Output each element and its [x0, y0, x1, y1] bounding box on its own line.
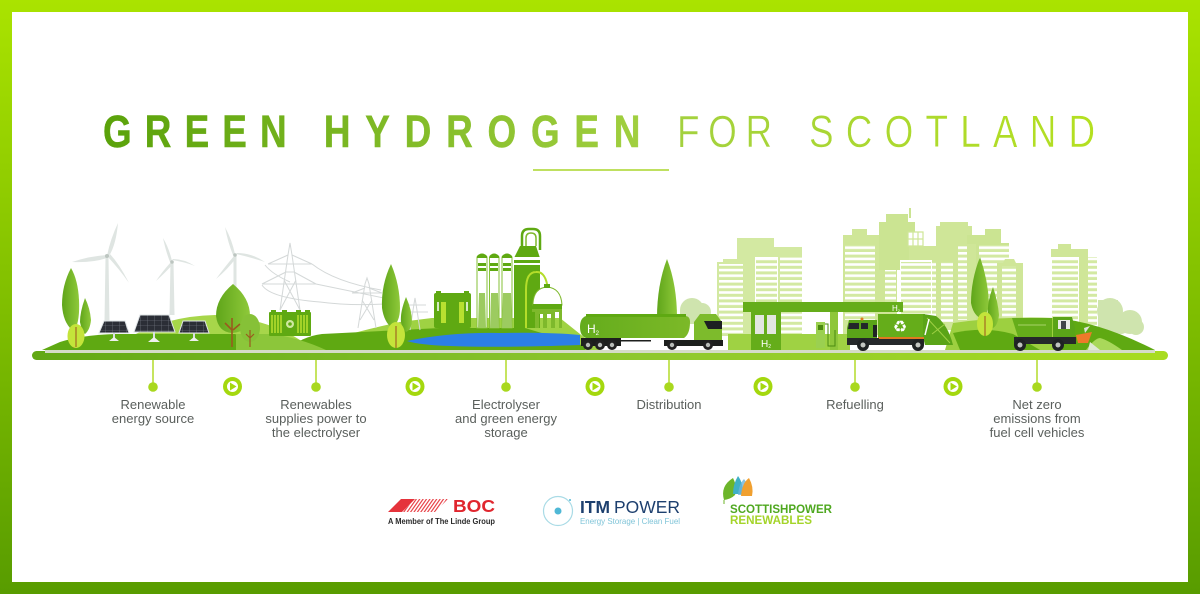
title: FOR: [677, 107, 772, 157]
icon: refuelling station: 2: [768, 344, 771, 350]
logo: BOC: A Member of The Linde Group: [388, 516, 495, 526]
icon: battery storage: [434, 291, 471, 328]
logo: BOC: BOC: [453, 496, 495, 516]
icon: hydrogen tanker truck: [580, 314, 723, 350]
city skyline: [717, 208, 1097, 338]
step label: renewables supplies power: Renewables: [280, 397, 352, 412]
icon: recycling truck: ♻: [893, 319, 907, 336]
step label: electrolyser and storage: Electrolyser: [472, 397, 541, 412]
icon: recycling truck: [847, 314, 953, 351]
title: GREEN: [103, 107, 287, 157]
icon: lake: [407, 333, 580, 347]
step label: electrolyser and storage: storage: [484, 425, 528, 440]
icon: arrow 5: [944, 377, 962, 396]
icon: refuelling station: 2: [898, 308, 901, 313]
icon: arrow 1: [223, 377, 242, 396]
step label: net zero emissions: Net zero: [1012, 397, 1062, 412]
title: SCOTLAND: [809, 107, 1095, 157]
step connector lines: [153, 360, 1037, 386]
icon: road sweeper truck: [1012, 317, 1100, 351]
step label: renewables supplies power: supplies power to: [265, 411, 367, 426]
icon: hydrogen tanker truck: 2: [596, 331, 600, 337]
step label: renewable energy source: energy source: [112, 411, 194, 426]
icon: tree group centre left: [382, 264, 412, 348]
icon: transformer: [269, 310, 311, 336]
logo: ScottishPower Renewables: [723, 476, 833, 527]
icon: tree and bush group left: [62, 268, 260, 348]
step label: distribution: Distribution: [636, 397, 702, 412]
step label: refuelling: Refuelling: [826, 397, 884, 412]
step label: net zero emissions: fuel cell vehicles: [990, 425, 1085, 440]
bushes: [680, 298, 1144, 335]
icon: wind turbines: [72, 223, 265, 321]
icon: arrow 3: [586, 377, 604, 396]
step label: renewable energy source: Renewable: [120, 397, 186, 412]
icon: solar panels: [99, 315, 209, 342]
logo: ITM Power: ITM: [580, 497, 610, 517]
title: [103, 107, 1095, 157]
icon: arrow 4: [754, 377, 772, 396]
icon: arrow 2: [406, 377, 424, 396]
icon: refuelling station: H: [761, 339, 768, 350]
logo: ITM Power: POWER: [614, 497, 680, 517]
logo: ITM Power: Energy Storage | Clean Fuel: [580, 516, 680, 526]
icon: pylons and power lines: [262, 243, 428, 330]
icon: hydrogen tanker truck: H: [587, 322, 596, 336]
logo: ScottishPower Renewables: SCOTTISHPOWER: [730, 504, 833, 516]
title underline: [533, 169, 669, 171]
road: [32, 350, 1168, 360]
icon: refuelling station: H: [892, 304, 898, 313]
step label: net zero emissions: emissions from: [993, 411, 1081, 426]
step dots: [148, 382, 1042, 392]
icon: tree group right: [971, 257, 999, 336]
hills and ground: [42, 315, 1155, 350]
logo: ITM Power: [544, 496, 680, 526]
title: HYDROGEN: [324, 107, 640, 157]
icon: refuelling station: [743, 302, 903, 350]
logo: ScottishPower Renewables: RENEWABLES: [730, 515, 812, 527]
icon: electrolyser plant: [477, 229, 562, 328]
step label: electrolyser and storage: and green energy: [455, 411, 557, 426]
step label: renewables supplies power: the electrolyser: [272, 425, 361, 440]
icon: tree behind tanker: [657, 259, 677, 318]
logo: BOC: [388, 496, 495, 526]
